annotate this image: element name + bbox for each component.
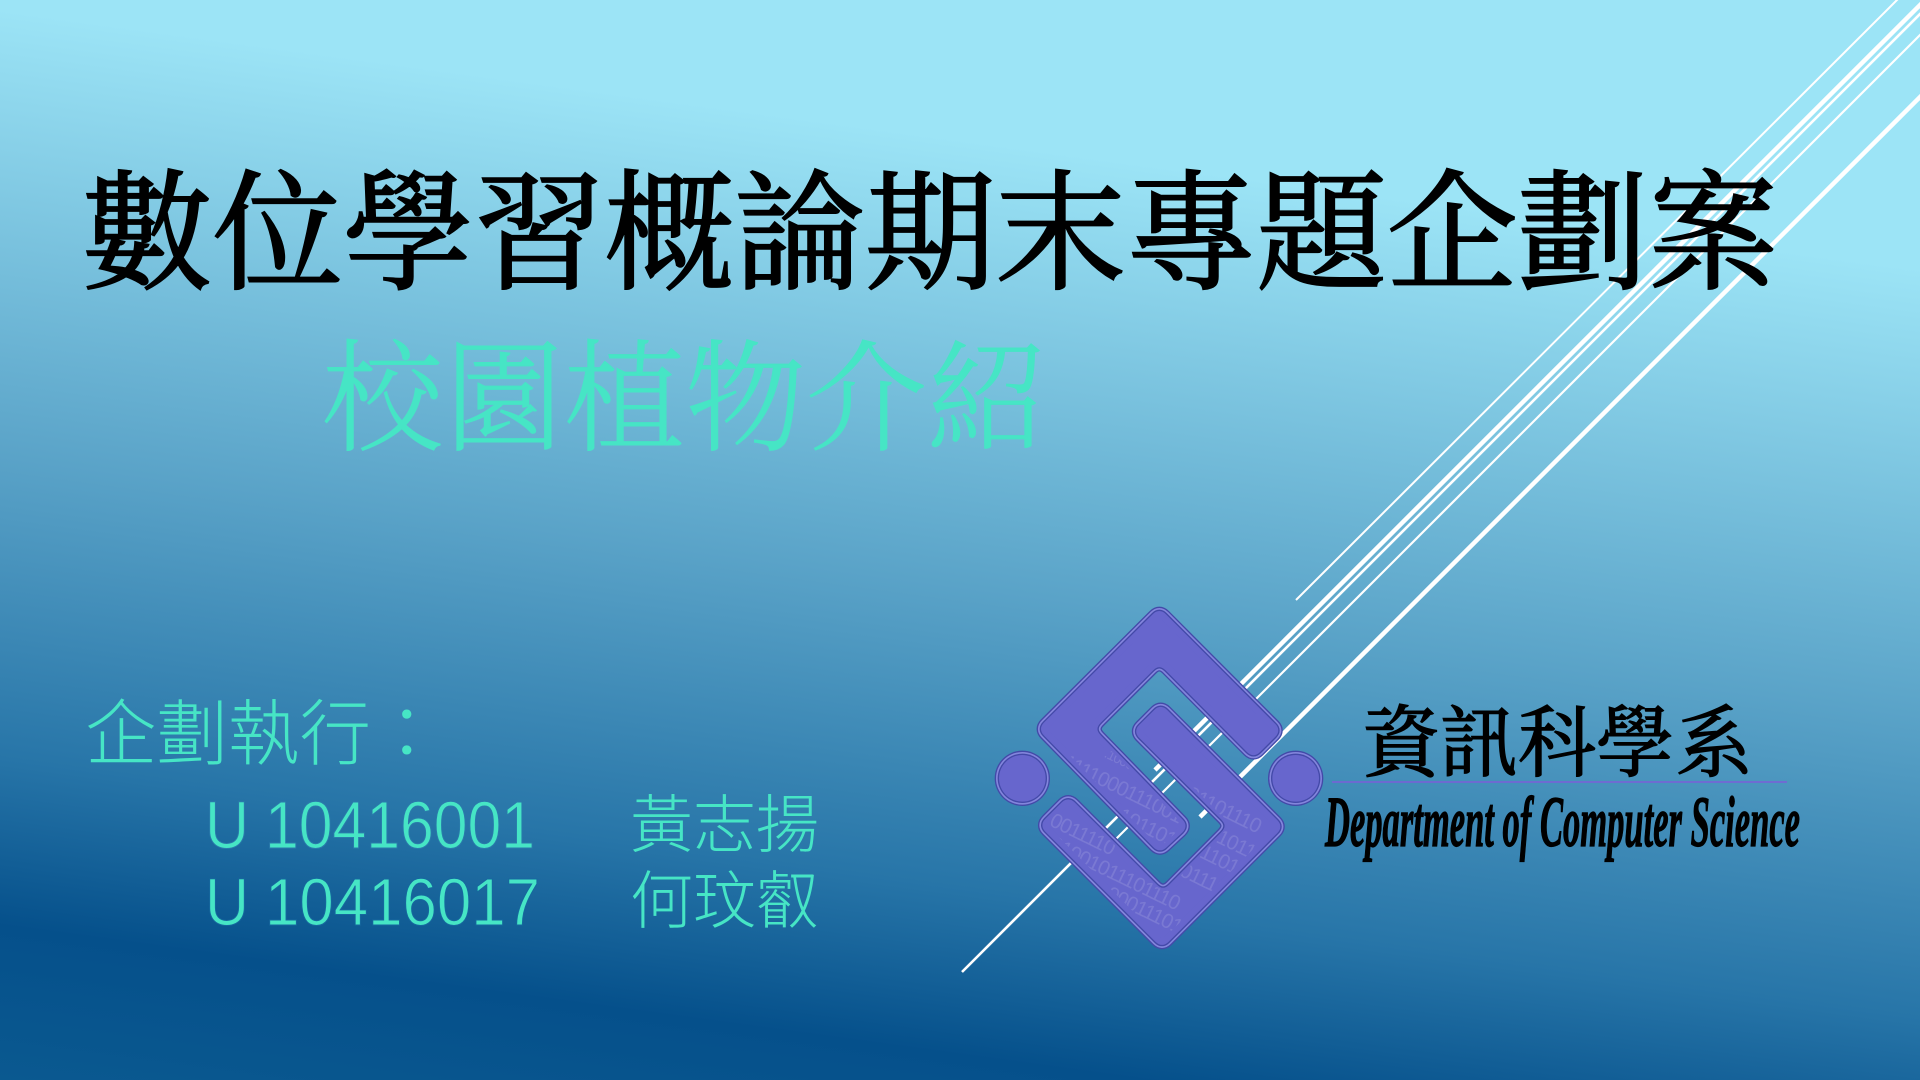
- logo: left dot: [995, 751, 1050, 806]
- logo: binary digits: 1011011: [1114, 804, 1189, 856]
- team member 2: [205, 865, 819, 940]
- team member 1: [205, 788, 819, 863]
- team member 2: 10416017: [265, 865, 540, 940]
- team heading: 企劃執行：: [85, 695, 443, 775]
- logo: binary digits: 11011: [1196, 840, 1251, 883]
- diagonal white lines: [962, 0, 1920, 972]
- purple divider: [1332, 781, 1787, 783]
- department name in Chinese: 資訊科學系: [1362, 700, 1752, 787]
- logo: binary digits: 01110: [1176, 859, 1231, 901]
- logo: binary digits: 01101110: [1183, 782, 1265, 838]
- department logo: [995, 614, 1323, 942]
- team member 2: 何玟叡: [630, 867, 819, 937]
- team member 1: 黃志揚: [630, 791, 819, 861]
- logo: binary digits: 0011110: [1046, 809, 1119, 860]
- title: 數位學習概論期末專題企劃案: [82, 164, 1779, 308]
- logo: binary digits: 101110: [1213, 825, 1277, 873]
- logo: binary digits: 01001011101110: [1046, 832, 1184, 915]
- team member 2: U: [205, 865, 249, 940]
- subtitle: 校園植物介紹: [322, 334, 1048, 468]
- logo: binary digits: [1051, 751, 1262, 931]
- team member 1: U: [205, 788, 249, 863]
- logo: S shape: [1044, 614, 1277, 942]
- team member 1: 10416001: [265, 788, 535, 863]
- logo: right dot: [1268, 751, 1323, 806]
- logo: binary digits: 00011101: [1103, 882, 1186, 939]
- logo: binary digits: 1111000111001: [1059, 750, 1186, 828]
- logo: binary digits: .1000: [1102, 745, 1137, 773]
